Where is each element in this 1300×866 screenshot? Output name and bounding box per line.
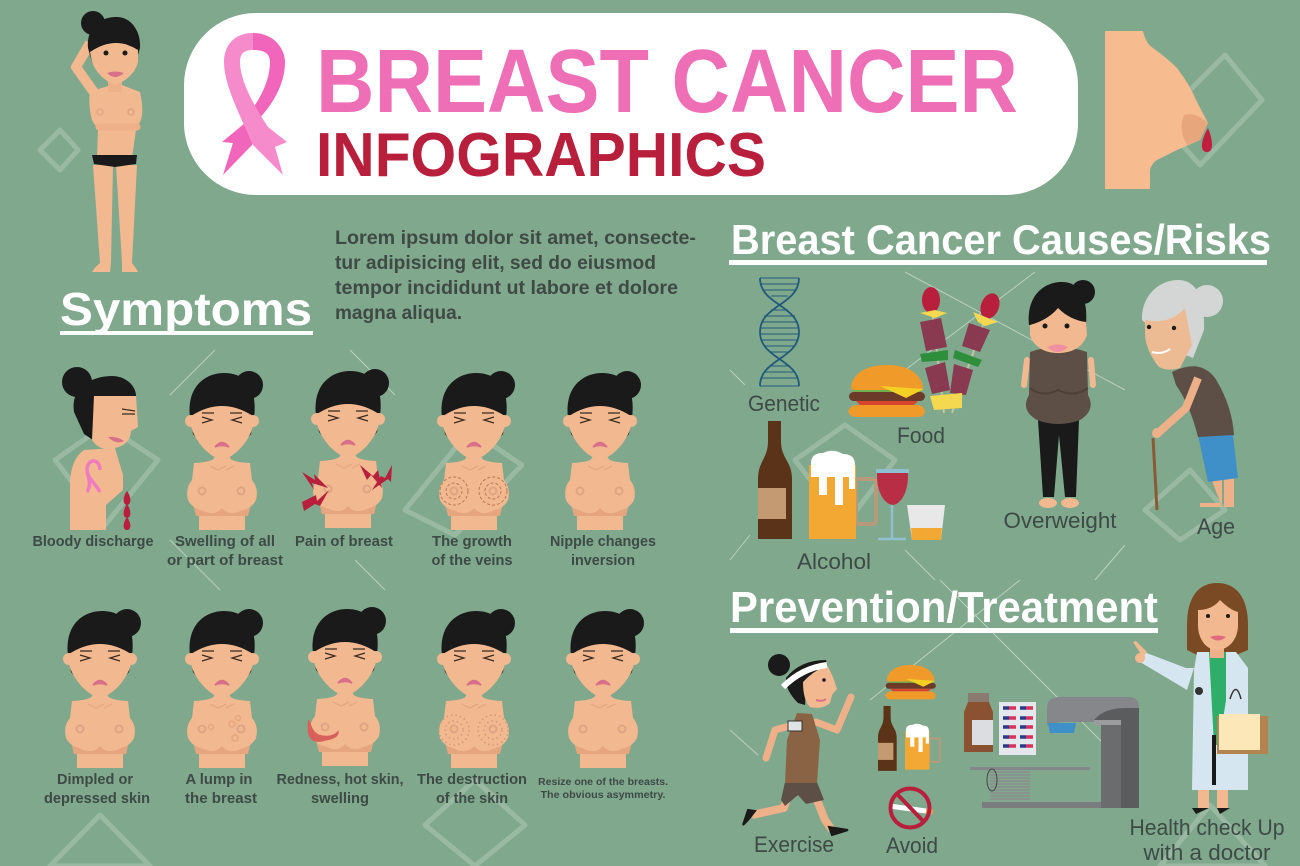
icon: things to avoid: Avoid xyxy=(886,833,938,858)
symptom: dimpled skin: Dimpled or xyxy=(57,771,133,788)
figure: overweight: Overweight xyxy=(1004,508,1116,533)
symptom: lump: A lump in xyxy=(186,771,252,788)
panel: symptoms row 2 xyxy=(44,607,668,807)
symptom: dimpled skin xyxy=(44,609,150,807)
symptom: growth of veins xyxy=(432,371,515,569)
symptom: growth of veins: The growth xyxy=(432,533,512,550)
heading: Symptoms: Symptoms xyxy=(60,283,312,335)
figure: doctor: Health check Up xyxy=(1130,815,1284,840)
icon: food xyxy=(848,287,1003,448)
panel: symptoms row 1 xyxy=(32,367,656,569)
subtitle: INFOGRAPHICS xyxy=(316,121,766,190)
symptom: destruction of skin: of the skin xyxy=(436,790,508,807)
symptom: asymmetry xyxy=(538,609,668,801)
symptom: redness: Redness, hot skin, xyxy=(276,771,404,788)
title: BREAST CANCER xyxy=(316,32,1018,132)
intro paragraph: Lorem ipsum dolor sit amet, consecte- xyxy=(335,228,696,249)
symptom: destruction of skin xyxy=(417,609,527,807)
symptom: redness: swelling xyxy=(311,790,369,807)
heading: prevention and treatment: Prevention/Treatment xyxy=(730,583,1158,632)
icon: DNA helix: Genetic xyxy=(748,391,820,416)
symptom: bloody discharge xyxy=(32,367,154,550)
symptom: swelling: or part of breast xyxy=(167,552,283,569)
panel: causes xyxy=(748,278,1238,574)
figure: old woman with cane: Age xyxy=(1197,514,1235,539)
icon: mammography machine xyxy=(970,697,1139,808)
title banner xyxy=(184,13,1078,195)
symptom: growth of veins: of the veins xyxy=(432,552,512,569)
symptom: asymmetry: The obvious asymmetry. xyxy=(540,790,666,801)
symptom: nipple changes xyxy=(550,371,656,569)
icon: alcohol xyxy=(758,421,945,574)
icon: things to avoid xyxy=(878,665,940,858)
symptom: asymmetry: Resize one of the breasts. xyxy=(538,777,668,788)
symptom: lump: the breast xyxy=(185,790,257,807)
figure: doctor: with a doctor xyxy=(1142,840,1270,865)
figure: runner: Exercise xyxy=(754,832,834,857)
icon: DNA helix xyxy=(748,278,820,416)
figure: doctor xyxy=(1130,583,1284,865)
symptom: bloody discharge: Bloody discharge xyxy=(32,533,154,550)
symptom: lump xyxy=(185,609,263,807)
symptom: swelling xyxy=(167,371,283,569)
breast illustration with discharge xyxy=(1105,31,1212,189)
heading: causes and risks: Breast Cancer Causes/Risks xyxy=(731,216,1271,263)
icon: pink ribbon xyxy=(222,33,287,175)
symptom: nipple changes: inversion xyxy=(571,552,635,569)
icon: medicine xyxy=(964,693,1036,755)
symptom: dimpled skin: depressed skin xyxy=(44,790,150,807)
intro paragraph xyxy=(335,228,696,324)
figure: old woman with cane xyxy=(1142,280,1238,539)
symptom: destruction of skin: The destruction xyxy=(417,771,527,788)
symptom: nipple changes: Nipple changes xyxy=(550,533,656,550)
intro paragraph: tempor incididunt ut labore et dolore xyxy=(335,278,678,299)
icon: alcohol: Alcohol xyxy=(797,549,871,574)
woman standing, full figure xyxy=(76,11,142,272)
banner pill xyxy=(184,13,1078,195)
panel: prevention xyxy=(743,583,1284,865)
figure: overweight xyxy=(1004,280,1116,533)
symptom: redness xyxy=(276,607,404,807)
symptom: pain xyxy=(295,369,393,550)
intro paragraph: tur adipisicing elit, sed do eiusmod xyxy=(335,253,656,274)
intro paragraph: magna aliqua. xyxy=(335,303,462,324)
icon: food: Food xyxy=(897,423,945,448)
symptom: pain: Pain of breast xyxy=(295,533,393,550)
symptom: swelling: Swelling of all xyxy=(175,533,275,550)
figure: runner xyxy=(743,654,851,857)
